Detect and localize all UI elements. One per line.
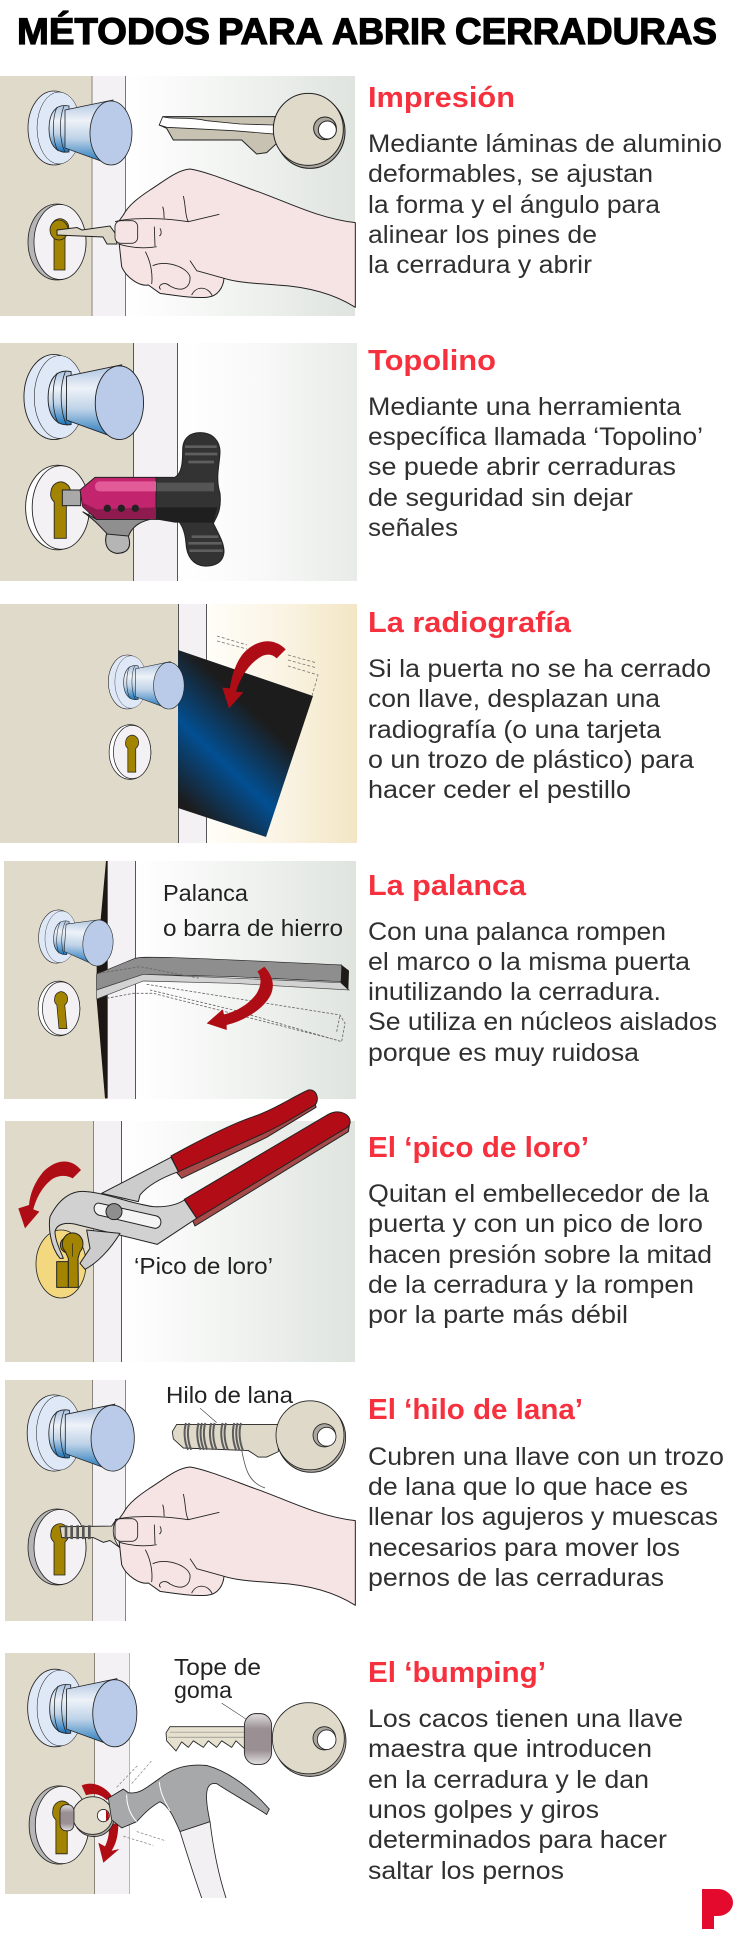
label: Tope de goma (174, 1654, 261, 1703)
icon: hand (115, 169, 355, 307)
icon: red rotation arrows (82, 1784, 119, 1863)
icon: yellow lock plate (36, 1230, 86, 1298)
icon: inserted key (50, 220, 117, 244)
icon: key in lock (60, 1797, 114, 1837)
heading: Topolino (368, 345, 496, 377)
body text (368, 130, 722, 279)
body text: Se utiliza en núcleos aislados (368, 1008, 717, 1036)
body text: la forma y el ángulo para (368, 191, 660, 219)
label: Pico de loro: ‘Pico de loro’ (134, 1253, 273, 1279)
icon: lock plate (28, 1509, 86, 1585)
label: Palanca (163, 880, 343, 941)
icon: lock plate (29, 1786, 89, 1864)
icon: parrot-beak pliers (49, 1090, 350, 1287)
icon: x-ray card (178, 650, 313, 837)
body text (368, 1443, 724, 1592)
body text: llenar los agujeros y muescas (368, 1503, 718, 1531)
body text: se puede abrir cerraduras (368, 453, 676, 481)
logo (702, 1889, 733, 1929)
title: PARA (218, 11, 323, 52)
label: Hilo de lana: Hilo de lana (166, 1382, 293, 1408)
body text: específica llamada ‘Topolino’ (368, 423, 703, 451)
text: El hilo de lana (368, 1394, 724, 1592)
label: Palanca: o barra de hierro (163, 915, 343, 941)
body text: Los cacos tienen una llave (368, 1705, 683, 1733)
icon: door knob (28, 1669, 137, 1747)
body text: hacen presión sobre la mitad (368, 1241, 712, 1269)
body text: con llave, desplazan una (368, 685, 660, 713)
icon: Topolino tool (62, 433, 224, 566)
body text (368, 918, 717, 1067)
body text: alinear los pines de (368, 221, 597, 249)
icon: red arrow (18, 1161, 81, 1228)
body text: inutilizando la cerradura. (368, 978, 661, 1006)
icon: door knob (108, 655, 184, 709)
body text: o un trozo de plástico) para (368, 746, 694, 774)
body text: porque es muy ruidosa (368, 1039, 639, 1067)
text: Impresión (368, 82, 722, 279)
text: El pico de loro (368, 1132, 712, 1329)
title (17, 11, 717, 52)
body text: necesarios para mover los (368, 1534, 680, 1562)
body text: determinados para hacer (368, 1826, 667, 1854)
body text (368, 1180, 712, 1329)
label: Tope de goma: Tope de (174, 1654, 261, 1680)
body text: puerta y con un pico de loro (368, 1210, 703, 1238)
body text: por la parte más débil (368, 1301, 628, 1329)
text: La palanca (368, 870, 717, 1067)
icon: lock plate (26, 465, 89, 550)
icon: crowbar (97, 957, 349, 1042)
door gap wedge (97, 861, 108, 1098)
body text: Mediante láminas de aluminio (368, 130, 722, 158)
panel: Topolino illustration (0, 343, 357, 581)
icon: bump key with rubber stop (166, 1703, 346, 1776)
heading: El ‘pico de loro’ (368, 1132, 589, 1164)
heading: El ‘hilo de lana’ (368, 1394, 583, 1426)
body text: señales (368, 514, 458, 542)
panel: El hilo de lana illustration (5, 1380, 355, 1621)
body text: de seguridad sin dejar (368, 484, 633, 512)
heading: La radiografía (368, 607, 572, 639)
icon: door knob (27, 1395, 134, 1471)
body text: Quitan el embellecedor de la (368, 1180, 709, 1208)
title: ABRIR (332, 11, 446, 52)
heading: Impresión (368, 82, 515, 114)
body text: radiografía (o una tarjeta (368, 716, 661, 744)
icon: lock plate (28, 204, 86, 280)
body text: la cerradura y abrir (368, 251, 592, 279)
body text: pernos de las cerraduras (368, 1564, 664, 1592)
heading: La palanca (368, 870, 527, 902)
icon: hand (115, 1467, 355, 1605)
body text: maestra que introducen (368, 1735, 652, 1763)
panel: La radiografía illustration (0, 604, 357, 843)
panel: El bumping illustration (5, 1653, 346, 1898)
label: Tope de goma: goma (174, 1677, 232, 1703)
icon: door knob (24, 354, 144, 440)
body text: Mediante una herramienta (368, 393, 681, 421)
icon: red arrow (207, 967, 273, 1030)
title: MÉTODOS (17, 11, 210, 52)
body text (368, 655, 711, 804)
body text: de la cerradura y la rompen (368, 1271, 694, 1299)
body text: unos golpes y giros (368, 1796, 599, 1824)
dashed card outline (217, 636, 318, 696)
icon: inserted wool key (60, 1519, 120, 1548)
icon: lock plate (38, 981, 80, 1036)
panel: Impresión illustration (0, 76, 355, 316)
text: El bumping (368, 1657, 683, 1885)
body text (368, 1705, 683, 1885)
text: La radiografía (368, 607, 711, 804)
body text: deformables, se ajustan (368, 160, 653, 188)
body text: de lana que lo que hace es (368, 1473, 688, 1501)
body text: Con una palanca rompen (368, 918, 666, 946)
body text: hacer ceder el pestillo (368, 776, 631, 804)
title: CERRADURAS (455, 11, 717, 52)
icon: hammer (108, 1761, 269, 1898)
icon: red arrow (222, 641, 286, 708)
body text: saltar los pernos (368, 1857, 564, 1885)
body text: el marco o la misma puerta (368, 948, 690, 976)
heading: El ‘bumping’ (368, 1657, 546, 1689)
icon: foil key (159, 93, 345, 168)
icon: door knob (28, 91, 132, 165)
body text: en la cerradura y le dan (368, 1766, 649, 1794)
icon: door knob (37, 909, 115, 967)
body text (368, 393, 703, 542)
text: Topolino (368, 345, 703, 542)
icon: lock plate (109, 725, 151, 779)
body text: Cubren una llave con un trozo (368, 1443, 724, 1471)
body text: Si la puerta no se ha cerrado (368, 655, 711, 683)
panel: El pico de loro illustration (5, 1090, 355, 1362)
icon: key with wool thread (172, 1401, 346, 1488)
label: Palanca: Palanca (163, 880, 248, 906)
panel: La palanca illustration (4, 861, 356, 1099)
